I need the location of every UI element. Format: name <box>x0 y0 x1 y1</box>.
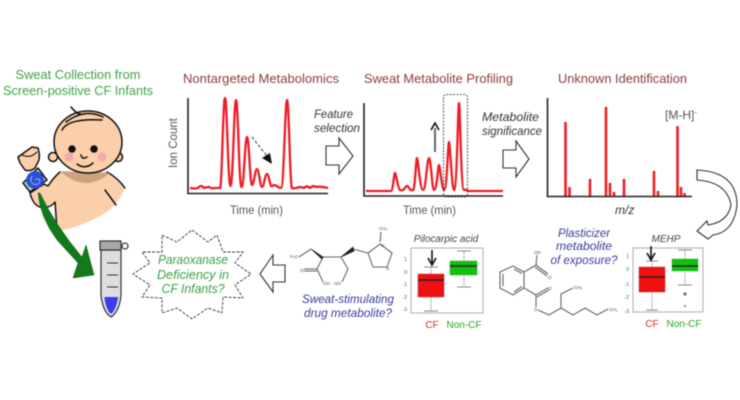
label: feature selection: selection <box>314 121 360 135</box>
text: sweat stimulating <box>302 292 394 320</box>
chart: pilocarpic acid boxplot: -2 <box>403 295 407 301</box>
label: precursor ion: [M-H] <box>665 108 694 122</box>
icon: sample tube <box>100 241 128 317</box>
chart: pilocarpic acid boxplot: Non-CF <box>446 320 482 331</box>
structure: pilocarpic acid: N <box>386 266 389 271</box>
callout: paraoxanase deficiency: CF Infants? <box>162 282 225 296</box>
chart: pilocarpic acid boxplot: -3 <box>403 307 407 313</box>
label: feature selection <box>314 107 360 135</box>
chart: MEHP boxplot: 0 <box>626 267 629 273</box>
heading: sweat collection <box>3 67 153 98</box>
text: plasticizer metabolite: Plasticizer <box>558 226 611 240</box>
icon: baby with sweat collector <box>18 107 125 231</box>
chart: MEHP boxplot: -3 <box>625 309 629 315</box>
label: metabolite significance: Metabolite <box>482 110 539 124</box>
text: plasticizer metabolite: of exposure? <box>550 253 618 267</box>
chart: MEHP boxplot: MEHP <box>652 234 681 245</box>
axis label: time: Time (min) <box>230 203 283 217</box>
structure: pilocarpic acid: CH₃ <box>379 226 387 231</box>
structure: pilocarpic acid: N <box>381 243 384 248</box>
structure: MEHP: O <box>548 275 552 280</box>
chart: MEHP boxplot: CF <box>645 319 659 330</box>
label: feature selection: Feature <box>314 107 353 121</box>
chart: pilocarpic acid boxplot: -1 <box>403 282 407 288</box>
label: precursor ion: - <box>694 108 697 117</box>
arrow: to paraoxanase <box>260 255 285 292</box>
chart: pilocarpic acid boxplot: 1 <box>404 257 407 263</box>
structure: MEHP: CH₃ <box>574 285 582 290</box>
callout: paraoxanase deficiency: Deficiency in <box>157 268 229 282</box>
text: plasticizer metabolite: metabolite <box>556 239 612 253</box>
arrow: curved to plasticizer <box>697 170 737 239</box>
arrow: green collection arrow <box>38 193 94 278</box>
chart: pilocarpic acid boxplot: CF <box>425 320 439 331</box>
structure: MEHP: CH₃ <box>609 307 617 312</box>
structure: pilocarpic acid: OH <box>323 281 330 286</box>
chart: MEHP boxplot: 1 <box>626 254 629 260</box>
structure: pilocarpic acid <box>290 226 392 286</box>
structure: MEHP: O <box>534 307 538 312</box>
heading: unknown identification: Unknown Identification <box>558 71 687 86</box>
label: metabolite significance <box>482 110 542 138</box>
structure: pilocarpic acid: HO <box>334 281 341 286</box>
chart: MEHP boxplot: Non-CF <box>666 319 702 330</box>
axis label: time: Time (min) <box>403 203 456 217</box>
structure: MEHP: OH <box>534 250 541 255</box>
heading: sweat collection: Sweat Collection from <box>16 67 140 82</box>
axis label: m/z: m/z <box>615 203 634 217</box>
structure: pilocarpic acid: H₃C <box>290 254 299 259</box>
chart: metabolite profile <box>364 94 503 197</box>
heading: nontargeted metabolomics: Nontargeted Metabolomics <box>183 71 340 86</box>
callout: paraoxanase deficiency <box>133 230 251 319</box>
chart: nontargeted chromatogram <box>188 98 328 194</box>
arrow: to identification <box>503 141 529 177</box>
chart: MEHP boxplot <box>625 234 703 330</box>
chart: mass spectrum <box>548 98 692 196</box>
chart: MEHP boxplot: -2 <box>625 295 629 301</box>
structure: pilocarpic acid: O <box>300 268 304 273</box>
arrow: to profiling <box>326 138 353 174</box>
callout: paraoxanase deficiency: Paraoxanase <box>158 253 228 267</box>
text: plasticizer metabolite <box>550 226 618 267</box>
chart: pilocarpic acid boxplot: 0 <box>404 270 407 276</box>
chart: pilocarpic acid boxplot: Pilocarpic acid <box>414 234 479 245</box>
text: sweat stimulating: Sweat-stimulating <box>302 292 394 306</box>
axis label: ion count: Ion Count <box>166 117 180 168</box>
structure: MEHP: O <box>548 286 552 291</box>
structure: MEHP <box>500 250 617 315</box>
heading: sweat collection: Screen-positive CF Infants <box>3 83 153 98</box>
chart: MEHP boxplot: -1 <box>625 282 629 288</box>
text: sweat stimulating: drug metabolite? <box>304 306 392 320</box>
heading: sweat metabolite profiling: Sweat Metabolite Profiling <box>364 71 513 86</box>
chart: pilocarpic acid boxplot <box>403 234 483 331</box>
label: metabolite significance: significance <box>482 124 542 138</box>
